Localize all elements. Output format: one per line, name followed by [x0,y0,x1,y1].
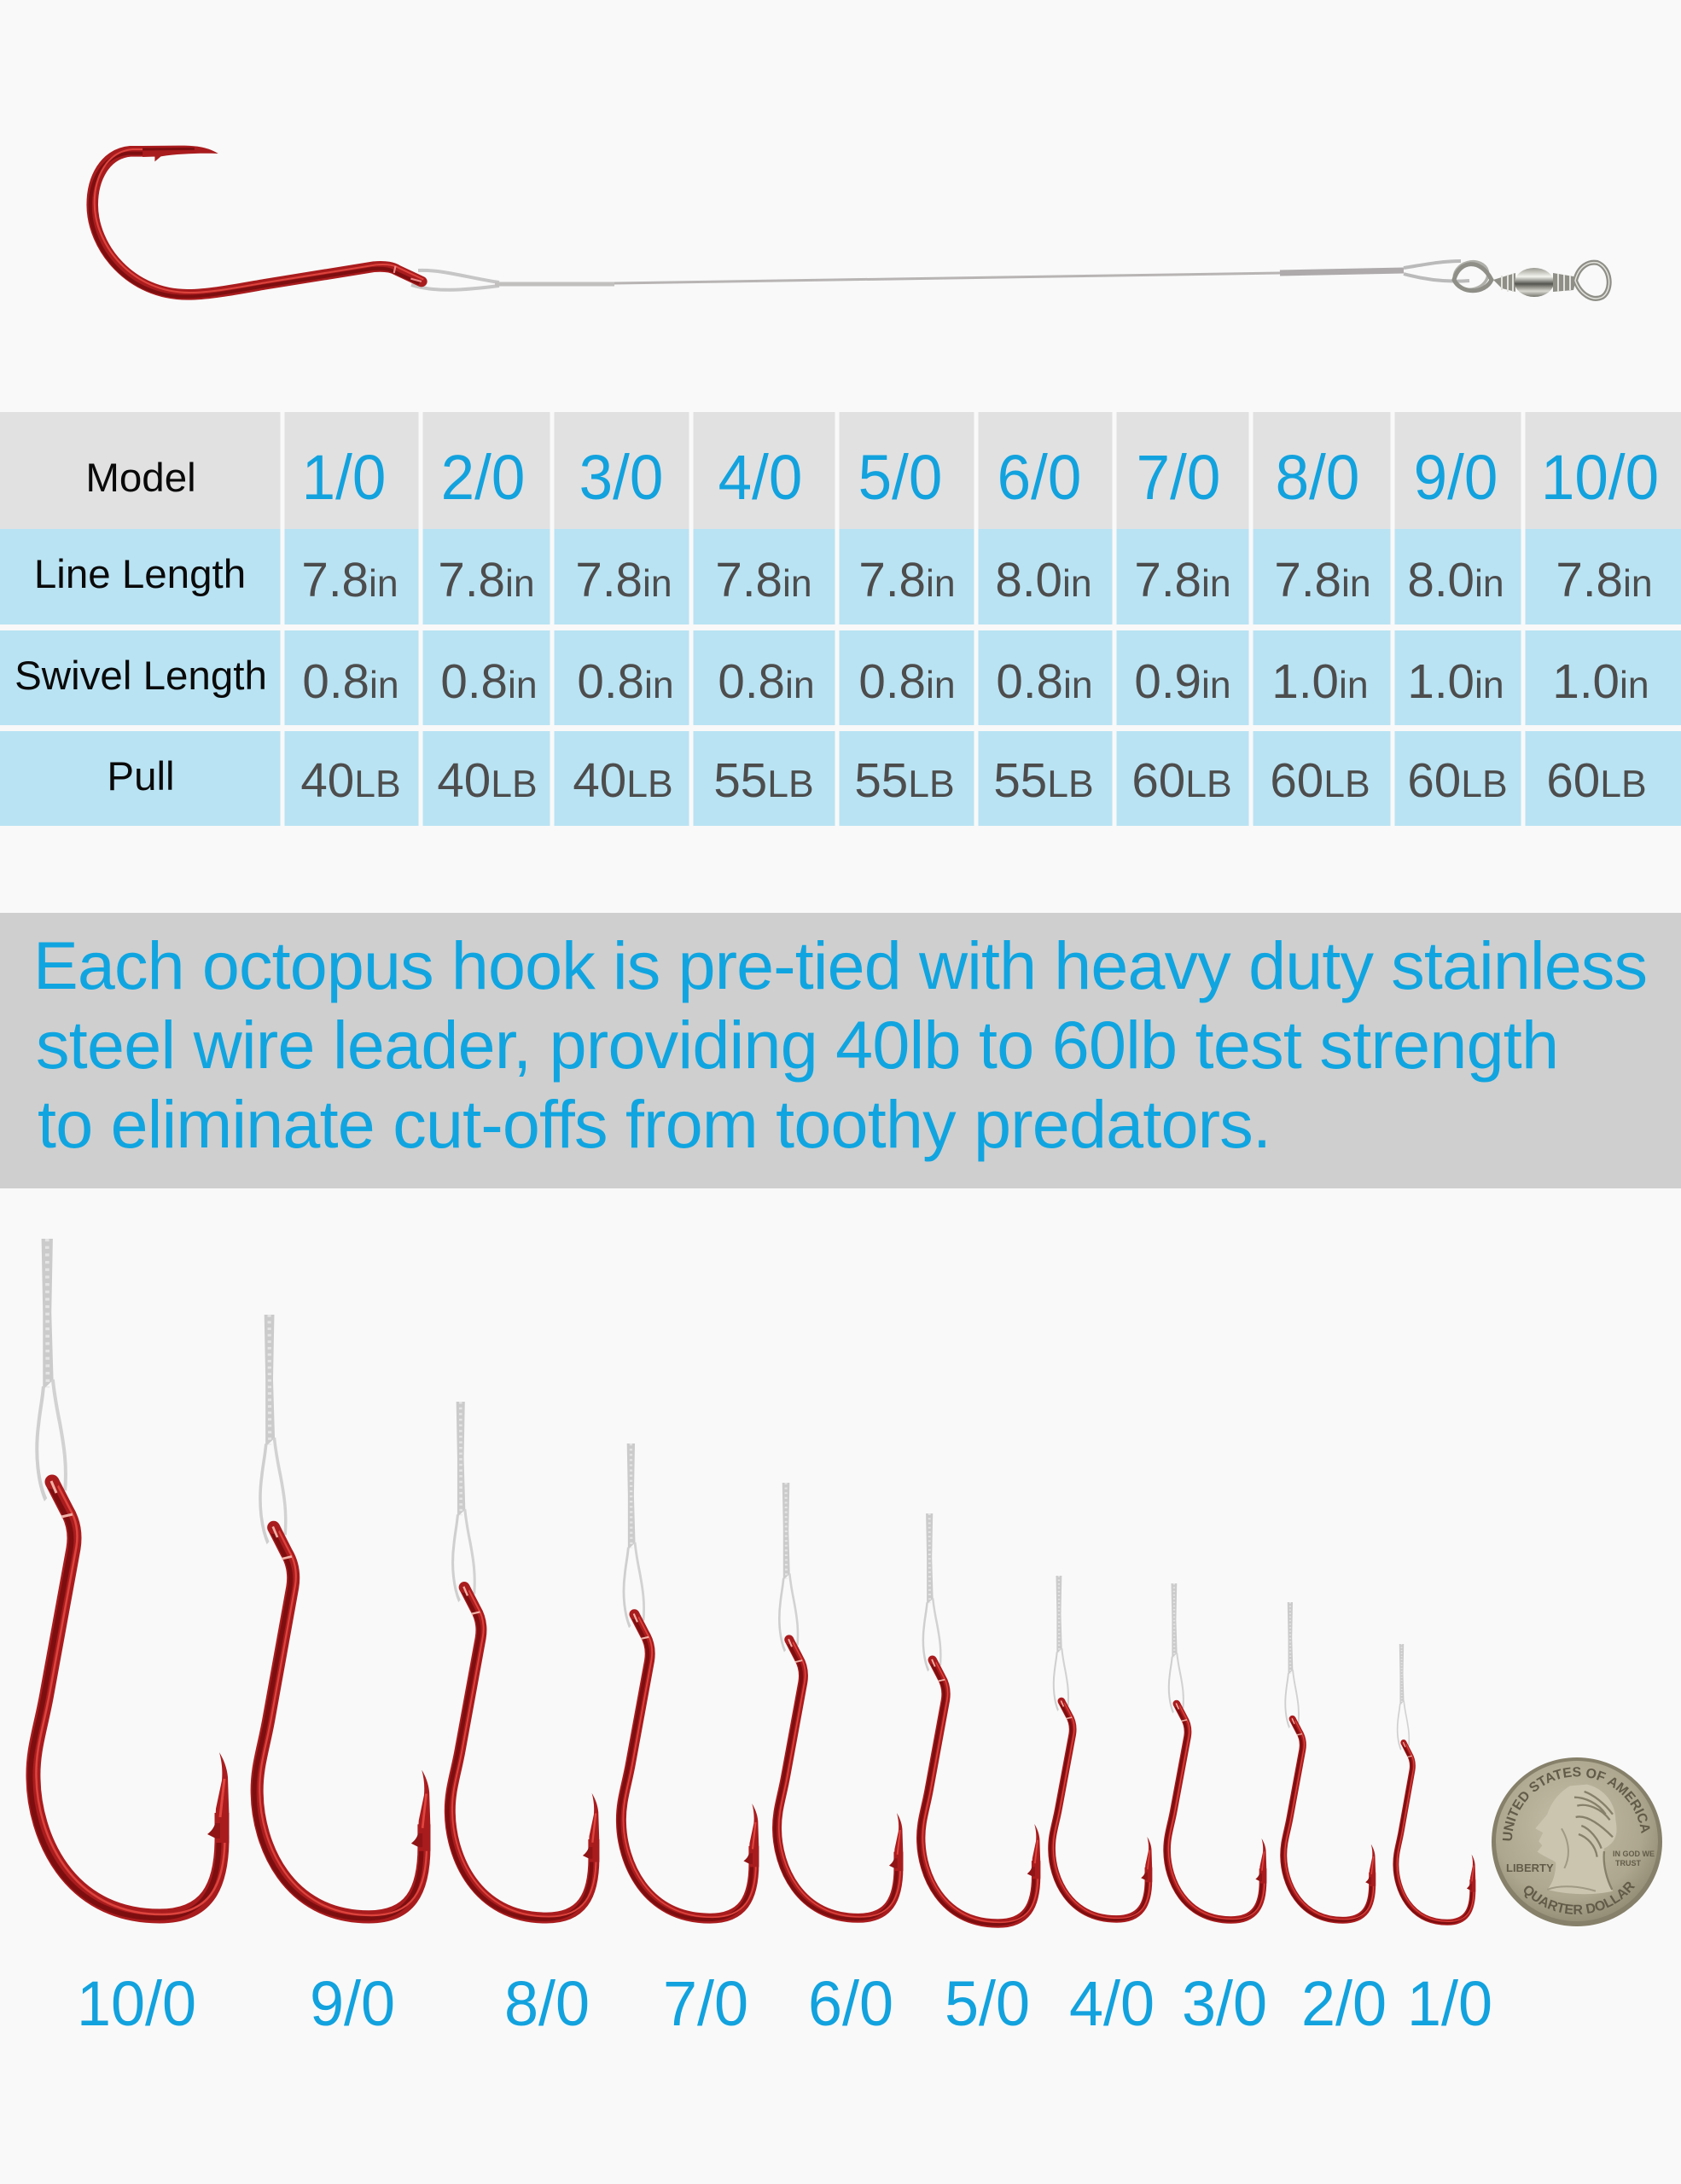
row: swivel length: 1.0in [1407,654,1504,708]
size labels: 7/0 [663,1969,748,2039]
row: model: 2/0 [441,442,525,513]
row: pull: 60LB [1546,753,1647,807]
photo: red hook with wire leader and swivel [90,146,1609,299]
size labels: 8/0 [504,1969,590,2039]
size labels: 1/0 [1407,1969,1492,2039]
hook 10/0 [30,1239,229,1918]
coin inscriptions [1502,1767,1655,1914]
row: model: 6/0 [998,442,1081,513]
coin inscriptions: IN GOD WE [1613,1850,1655,1858]
row: pull: 55LB [713,753,814,807]
line length row background [0,529,1681,624]
size labels: 9/0 [310,1969,395,2039]
size labels: 6/0 [808,1969,893,2039]
hook 1/0 [1394,1644,1475,1923]
hook 8/0 [448,1402,599,1920]
row: model: 10/0 [1541,442,1659,513]
hook 4/0 [1050,1576,1152,1920]
row: pull: Pull [107,754,175,799]
leader wire [411,261,1469,290]
row: model: 3/0 [579,442,663,513]
header row background [0,412,1681,529]
table: hook specifications [0,412,1681,826]
row: swivel length: 0.8in [577,654,674,708]
size labels: 2/0 [1301,1969,1387,2039]
photo: hooks by size with coin [26,1239,1662,2039]
row: pull: 40LB [573,753,673,807]
row: line length [34,552,1653,607]
coin inscriptions: TRUST [1615,1859,1641,1867]
row: line length: 8.0in [995,553,1092,607]
coin inscriptions: QUARTER DOLLAR [1524,1882,1635,1914]
row: model: 8/0 [1276,442,1359,513]
hook 5/0 [919,1513,1040,1925]
row: line length: 7.8in [858,553,956,607]
description text: Each octopus hook is pre-tied with heavy duty stainless [33,927,1648,1003]
row: swivel length: 1.0in [1552,654,1649,708]
size labels: 3/0 [1182,1969,1267,2039]
row: line length: 7.8in [1274,553,1371,607]
coin: Washington head [1535,1785,1617,1894]
row: pull: 55LB [854,753,955,807]
hook 9/0 [254,1315,430,1919]
row: swivel length [15,653,1649,708]
row: swivel length: Swivel Length [15,653,267,699]
coin inscriptions: LIBERTY [1506,1862,1554,1874]
size labels: 4/0 [1069,1969,1155,2039]
row: swivel length: 0.8in [718,654,815,708]
row: model: Model [85,456,196,501]
size labels: 10/0 [77,1969,196,2039]
row: swivel length: 0.8in [302,654,399,708]
row: swivel length: 1.0in [1271,654,1369,708]
row: model [85,442,1659,513]
row: pull: 60LB [1270,753,1370,807]
row: line length: 7.8in [1556,553,1653,607]
hook 3/0 [1166,1583,1266,1920]
row: pull: 60LB [1407,753,1508,807]
row: line length: 7.8in [715,553,812,607]
hook 2/0 [1283,1602,1376,1921]
row: pull [107,753,1647,807]
row: model: 1/0 [302,442,386,513]
row: line length: 7.8in [1134,553,1231,607]
size labels: 5/0 [945,1969,1030,2039]
pull row background [0,731,1681,826]
row: model: 4/0 [718,442,802,513]
row: swivel length: 0.8in [996,654,1093,708]
row: model: 9/0 [1414,442,1498,513]
hook 6/0 [775,1483,903,1920]
hook 7/0 [619,1443,759,1920]
row: swivel length: 0.9in [1134,654,1231,708]
description text [33,927,1648,1162]
row: line length: Line Length [34,552,246,597]
description text: steel wire leader, providing 40lb to 60lb test strength [36,1007,1559,1083]
panel: description band [0,913,1681,1188]
row: pull: 40LB [437,753,538,807]
swivel length row background [0,630,1681,725]
row: line length: 7.8in [575,553,672,607]
row: line length: 7.8in [438,553,535,607]
row: line length: 7.8in [301,553,398,607]
row: swivel length: 0.8in [440,654,538,708]
row: swivel length: 0.8in [858,654,956,708]
size labels [77,1969,1492,2039]
row: model: 5/0 [858,442,942,513]
row: pull: 40LB [300,753,401,807]
row: model: 7/0 [1137,442,1220,513]
coin inscriptions: UNITED STATES OF AMERICA [1502,1767,1650,1841]
hook body [90,146,423,297]
description text: to eliminate cut-offs from toothy predators. [38,1086,1271,1162]
swivel [1451,258,1609,299]
row: line length: 8.0in [1407,553,1504,607]
row: pull: 55LB [993,753,1094,807]
coin: US quarter for scale [1492,1757,1662,1926]
row: pull: 60LB [1131,753,1232,807]
